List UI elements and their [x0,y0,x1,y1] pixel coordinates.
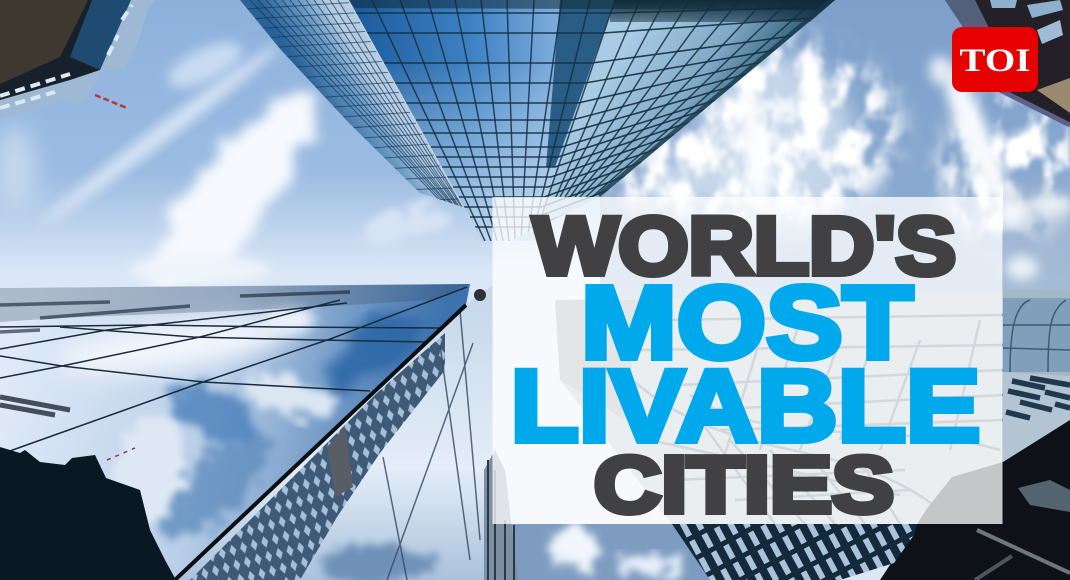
title line: MOST: MOST [581,265,913,380]
title line: WORLD'S: WORLD'S [533,201,956,292]
tower grid lines [349,0,835,241]
tower right face [510,0,835,241]
logo: TOI badge [952,27,1038,92]
tower left face [230,0,483,241]
reflected building silhouette [0,447,176,580]
title line: LIVABLE: LIVABLE [510,349,980,463]
skyscraper: central tower seen from below [230,0,835,241]
building: lower-right reflective face [175,285,493,580]
building: top-left corner tower [0,0,155,118]
title line: CITIES: CITIES [594,440,894,529]
building: top-right corner tower [945,0,1070,125]
sky strip and cloud below the panel [484,450,712,580]
logo: TOI badge: TOI [960,43,1030,79]
building: lower-right curved tower [555,290,1070,580]
building: lower-left glass facade [0,284,470,580]
title: World's Most Livable Cities [510,201,980,529]
translucent title panel [492,197,1002,524]
clouds: left sky [0,34,448,316]
tower main face [349,0,625,241]
clouds: right sky [602,24,1070,290]
